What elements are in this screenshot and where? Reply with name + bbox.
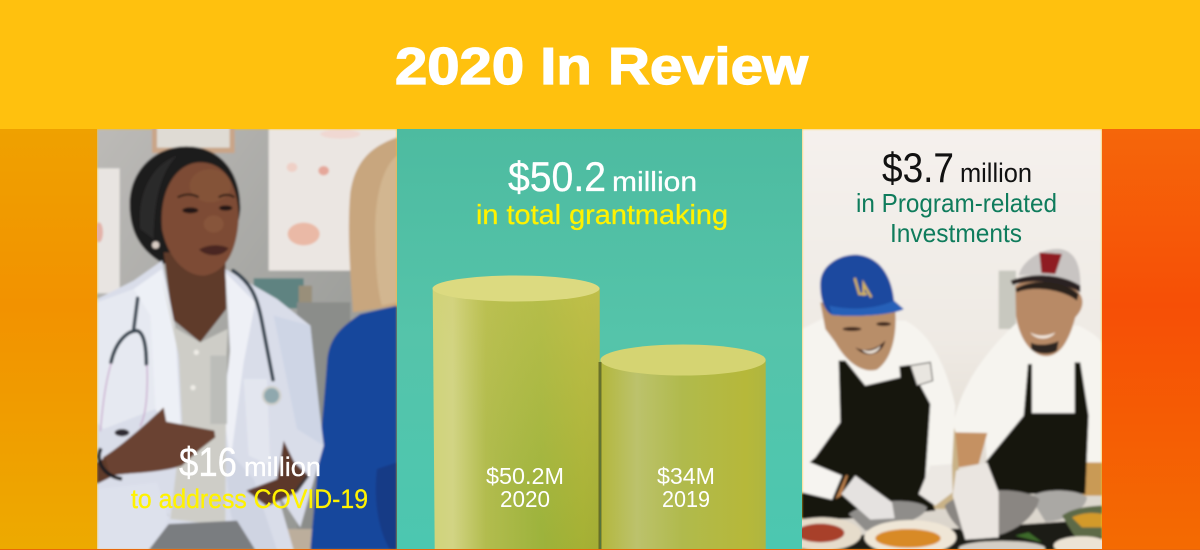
panel: COVID-19 doctor photo [95, 126, 397, 550]
bar: 2019: 2019 [662, 486, 710, 512]
callout: 3.7 million: Investments [890, 218, 1022, 248]
plates of food [783, 517, 861, 550]
bar: 2020: $50.2M [486, 463, 564, 489]
heading: total grantmaking: $50.2 [508, 153, 606, 200]
stethoscope [100, 271, 273, 431]
left chef sleeve and gloves [802, 459, 842, 500]
panel: program-related investments photo [783, 129, 1110, 550]
callout: 3.7 million [856, 144, 1057, 248]
photo: doctor talking with patient [95, 126, 397, 550]
callout: 16 million: to address COVID-19 [131, 484, 368, 514]
right chef cap [1019, 249, 1080, 289]
callout: 3.7 million: million [960, 158, 1032, 188]
header band [0, 0, 1200, 129]
callout: 16 million: $16 [179, 439, 237, 485]
neck [164, 252, 226, 342]
right chef apron [985, 362, 1089, 494]
hair [130, 146, 240, 264]
callout: 16 million: million [244, 452, 321, 482]
bowls [849, 501, 927, 531]
blonde hair [349, 137, 397, 312]
panel: total grantmaking [397, 129, 802, 549]
right chef shirt [954, 324, 1102, 464]
heading: total grantmaking: million [612, 166, 697, 197]
face [162, 162, 239, 276]
heading: total grantmaking [476, 153, 728, 230]
counter [802, 519, 1102, 550]
callout: 3.7 million: in Program-related [856, 188, 1057, 218]
right chef face [1015, 280, 1082, 356]
bar: 2020 [432, 276, 600, 549]
right orange background [1102, 129, 1200, 550]
hands [103, 407, 215, 476]
lab coat [97, 261, 324, 550]
bar chart: cylinders [432, 276, 766, 549]
blue sweater [310, 306, 397, 550]
left chef cap [820, 255, 904, 316]
callout: 16 million [131, 439, 368, 514]
left orange background [0, 129, 97, 550]
shirt [166, 294, 228, 524]
left chef face [820, 302, 896, 370]
right chef arm and glove [955, 432, 987, 467]
trousers [149, 521, 255, 550]
heading: total grantmaking: in total grantmaking [476, 199, 728, 230]
photo: two chefs plating food [783, 129, 1110, 550]
left chef apron [802, 361, 935, 519]
left chef shirt [802, 319, 955, 479]
callout: 3.7 million: $3.7 [882, 144, 954, 191]
bar: 2019: $34M [657, 463, 715, 489]
title: 2020 In Review [395, 38, 809, 96]
bar: 2020: 2020 [500, 486, 550, 512]
bar: 2019 [598, 344, 766, 549]
